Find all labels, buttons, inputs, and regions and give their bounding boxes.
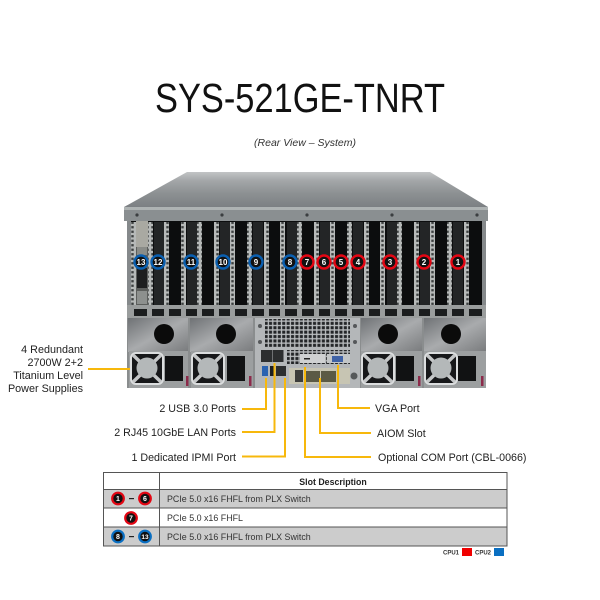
slot markers CPU2: 13 [137,258,146,267]
centre I/O panel [255,318,360,388]
VGA port [327,354,350,363]
label: power supplies: 4 Redundant [21,344,83,356]
chassis lid [124,172,488,207]
row 1: 1 [116,496,120,503]
label: VGA: VGA Port [375,403,420,415]
row 2: PCIe 5.0 x16 FHFL [167,513,243,523]
label: power supplies: Power Supplies [8,383,84,395]
lower chassis panel [127,318,486,388]
power supply 4 [424,318,486,388]
slot markers CPU1: 1 [456,258,461,267]
rear slot bay [127,221,486,318]
chassis front band [124,207,488,221]
power supply 3 [361,318,422,388]
CPU legend: CPU1 [443,550,460,556]
row 2: 7 [129,516,133,522]
title: SYS-521GE-TNRT [155,75,445,121]
power supply 2 [190,318,253,388]
row 2 [125,512,243,524]
COM bracket [300,354,325,363]
row 3: 8 [116,534,120,541]
AIOM slot [289,368,350,384]
slot markers CPU2: 9 [254,258,259,267]
slot description table [103,472,507,546]
USB ports [262,366,268,376]
CPU legend [443,548,504,556]
slot markers CPU1: 5 [339,258,344,267]
slot markers CPU2 [134,256,296,268]
row 3: PCIe 5.0 x16 FHFL from PLX Switch [167,532,311,542]
server chassis [124,172,488,388]
CPU legend: CPU2 [475,550,492,556]
LAN ports [261,350,272,362]
slot 13 card [136,221,148,305]
slot markers CPU2: 10 [219,258,228,267]
IPMI port [276,366,286,376]
slot markers CPU1: 6 [322,258,327,267]
slot markers CPU2: 12 [154,258,163,267]
label: USB: 2 USB 3.0 Ports [159,403,236,415]
label: power supplies: 2700W 2+2 [27,357,83,369]
label: IPMI: 1 Dedicated IPMI Port [131,452,236,464]
slot markers CPU1: 2 [422,258,427,267]
slot markers CPU1: 4 [356,258,361,267]
row 1: PCIe 5.0 x16 FHFL from PLX Switch [167,494,311,504]
row 1 [112,493,311,504]
slot markers CPU2: 8 [288,258,293,267]
slot markers CPU2: 11 [187,258,196,267]
label: power supplies: Titanium Level [13,370,83,382]
row 3: 13 [141,534,149,541]
label: AIOM: AIOM Slot [377,428,426,440]
label: COM: Optional COM Port (CBL-0066) [378,452,526,464]
subtitle: (Rear View – System) [254,137,356,149]
power supply 1 [128,318,188,388]
slot markers CPU1: 7 [305,258,310,267]
label: LAN: 2 RJ45 10GbE LAN Ports [114,427,236,439]
slot markers CPU1: 3 [388,258,393,267]
slot markers CPU1 [300,256,464,268]
leader lines [88,363,371,457]
row 3 [112,531,311,542]
table header: Slot Description [299,477,367,487]
rear vent perforations [287,350,350,364]
row 1: 6 [143,496,147,503]
